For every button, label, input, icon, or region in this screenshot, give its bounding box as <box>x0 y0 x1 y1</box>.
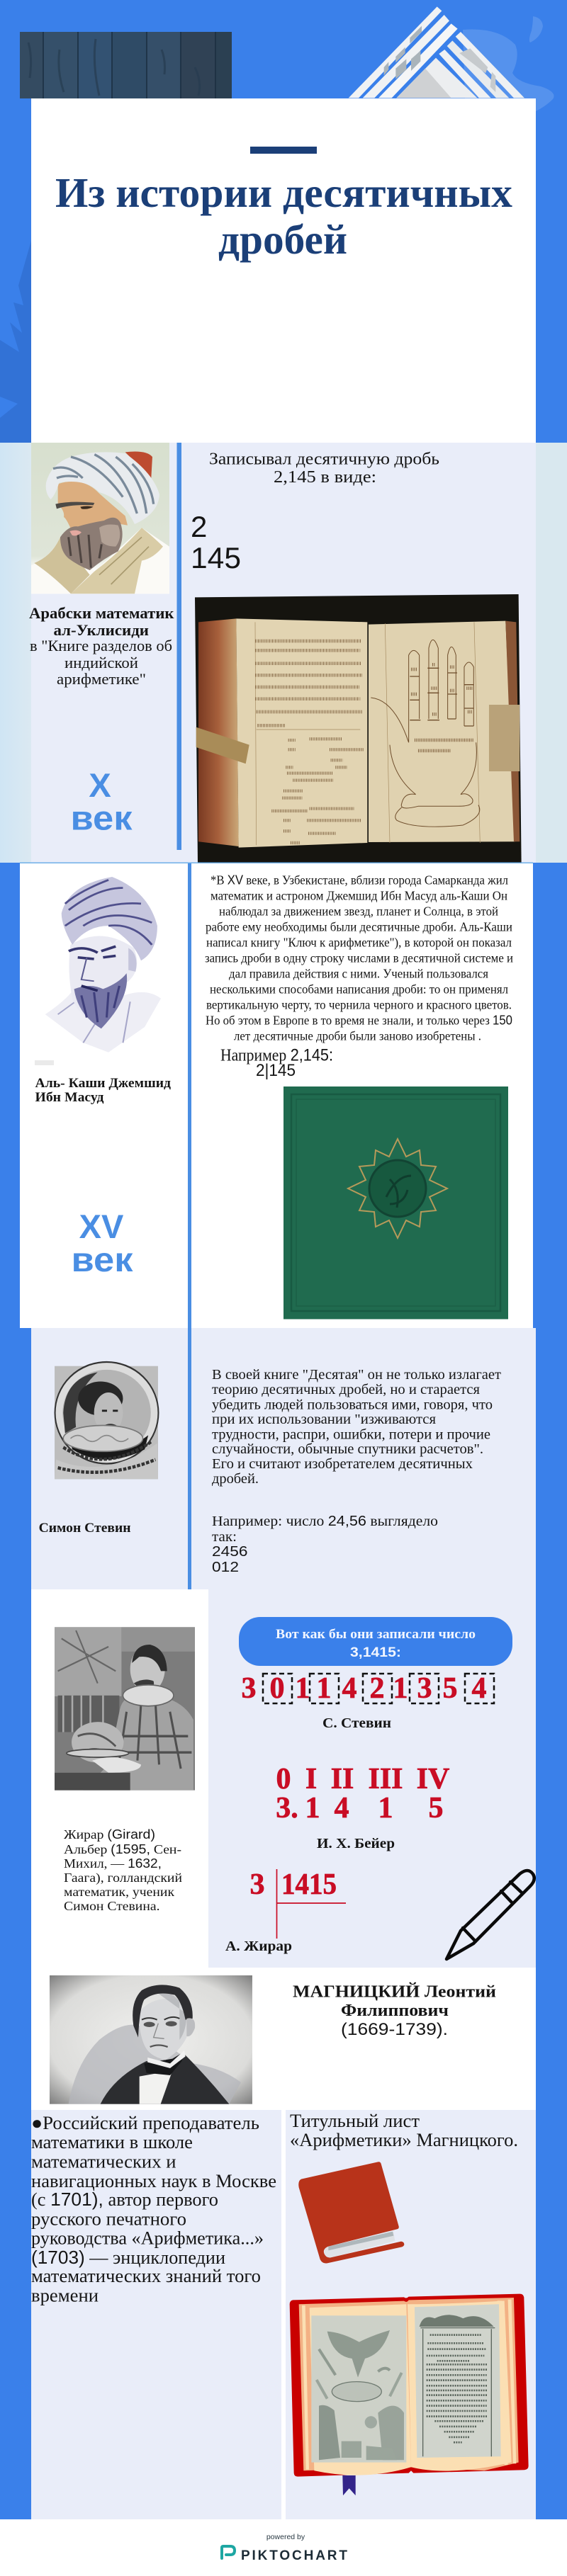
fraction notation: 145 <box>191 541 241 574</box>
Stevin notation: 2 <box>370 1672 384 1705</box>
example: 012 <box>212 1560 239 1575</box>
bio text: математик, ученик <box>64 1885 174 1899</box>
panel: biography <box>31 2110 281 2519</box>
intro text: Записывал десятичную дробь <box>209 450 439 469</box>
example <box>212 1514 438 1575</box>
Beyer notation: IV <box>417 1763 449 1795</box>
bio text: Гаага), голландский <box>64 1871 182 1885</box>
fraction notation <box>191 510 241 574</box>
Beyer notation: 3. <box>276 1792 298 1825</box>
Beyer notation: 1 <box>378 1792 393 1825</box>
Girard notation <box>225 1868 346 1954</box>
century label: X: век <box>71 800 133 837</box>
intro text <box>209 450 439 487</box>
Beyer notation: 1 <box>305 1792 320 1825</box>
section: Girard and notations <box>31 1589 536 1968</box>
right page text <box>420 2315 495 2456</box>
description: трудности, распри, ошибки, потери и прочие <box>212 1426 490 1442</box>
Stevin notation: 5 <box>442 1672 458 1705</box>
caption: Титульный лист <box>290 2111 420 2131</box>
example: Например: число 24,56 выглядело <box>212 1514 438 1529</box>
example notation: 2|145 <box>256 1061 296 1080</box>
title: Из истории десятичных <box>55 169 512 216</box>
paragraph: работе ему необходимы были десятичные дроби. Аль-Каши <box>206 919 512 934</box>
bio text <box>64 1827 182 1913</box>
panel: biography: русского печатного <box>31 2208 186 2230</box>
Stevin notation: 0 <box>269 1672 285 1705</box>
Girard notation: 1415 <box>281 1868 337 1901</box>
section: Stevin <box>31 1328 536 1589</box>
Beyer notation: И. Х. Бейер <box>317 1836 395 1851</box>
title: дробей <box>218 216 347 263</box>
century label: XV <box>71 1208 134 1279</box>
description: случайности, обычные спутники расчетов". <box>212 1441 483 1457</box>
Beyer notation: II <box>331 1763 354 1795</box>
description: Его и считают изобретателем десятичных <box>212 1456 473 1472</box>
footer <box>0 2519 567 2576</box>
description <box>212 1367 501 1487</box>
paragraph: запись дроби в одну строку числами в десятичной системе и <box>205 951 513 965</box>
section: Magnitsky header <box>31 1968 536 2110</box>
wood panel <box>20 32 232 98</box>
footer: powered by <box>266 2533 305 2541</box>
title <box>55 169 512 263</box>
green book cover <box>284 1086 508 1319</box>
fraction notation: 2 <box>191 510 207 543</box>
name <box>35 1076 171 1105</box>
Stevin notation: 3 <box>417 1672 432 1705</box>
header card <box>31 98 536 443</box>
caption: в "Книге разделов об <box>30 637 172 654</box>
name: МАГНИЦКИЙ Леонтий <box>293 1983 496 2002</box>
paragraph: написал книгу "Ключ к арифметике"), в которой он показал <box>206 935 512 950</box>
manuscript photo <box>195 594 522 863</box>
callout pill <box>239 1617 512 1666</box>
title accent bar <box>250 147 317 154</box>
panel: biography: руководства «Арифметика...» <box>31 2228 264 2248</box>
century label: X <box>71 766 133 837</box>
intro text: 2,145 в виде: <box>274 468 376 487</box>
paragraph: вертикальную черту, то чернила черного и красного цветов. <box>206 997 512 1011</box>
Stevin notation: 3 <box>241 1672 257 1705</box>
footer: PIKTOCHART <box>241 2548 347 2563</box>
portrait: Stevin <box>55 1362 158 1479</box>
portrait: al-Kashi <box>45 877 161 1052</box>
bio text: Симон Стевина. <box>64 1899 160 1913</box>
bookmark <box>342 2475 356 2495</box>
Girard notation: А. Жирар <box>225 1939 292 1954</box>
panel: biography: математических и <box>31 2152 176 2172</box>
paragraph: несколькими способами написания дроби: то он применял <box>210 982 508 996</box>
Beyer notation: III <box>368 1763 403 1795</box>
description: дробей. <box>212 1471 259 1487</box>
caption: Арабски математик <box>29 604 174 622</box>
paragraph: математик и астроном Джемшид Ибн Масуд аль-Каши Он <box>210 888 507 902</box>
Stevin notation: 4 <box>342 1672 357 1705</box>
portrait: Girard <box>55 1627 195 1791</box>
Girard notation: 3 <box>249 1868 265 1901</box>
callout pill: 3,1415: <box>350 1645 401 1660</box>
Stevin notation: С. Стевин <box>322 1715 391 1731</box>
name: Филиппович <box>341 2002 449 2020</box>
Beyer notation: 5 <box>428 1792 444 1825</box>
Stevin notation: 1 <box>295 1672 310 1705</box>
name: Ибн Масуд <box>35 1090 104 1105</box>
paragraph: дал правила действия с ними. Ученый пользовался <box>229 966 488 980</box>
divider <box>177 443 181 850</box>
century label: X: X <box>89 766 111 804</box>
name <box>293 1983 496 2039</box>
panel: title page <box>286 2110 536 2519</box>
Stevin notation: 1 <box>393 1672 408 1705</box>
panel: biography: ●Российский преподаватель <box>31 2113 259 2133</box>
portrait: al-Uqlidisi <box>31 443 169 594</box>
caption: арифметике" <box>57 670 146 688</box>
caption <box>29 604 174 688</box>
building photo <box>349 6 524 98</box>
Beyer notation: I <box>305 1763 317 1795</box>
icon: pencil <box>447 1871 534 1959</box>
bio text: Альбер (1595, Сен- <box>64 1842 181 1856</box>
caption: ал-Уклисиди <box>54 621 149 639</box>
small mark <box>35 1060 54 1065</box>
description: В своей книге "Десятая" он не только излагает <box>212 1367 501 1383</box>
example notation <box>220 1045 333 1080</box>
description: теорию десятичных дробей, но и старается <box>212 1382 480 1397</box>
caption: «Арифметики» Магницкого. <box>290 2130 518 2150</box>
panel: biography: (1703) — энциклопедии <box>31 2247 225 2268</box>
Stevin notation: 4 <box>472 1672 486 1705</box>
panel: biography: времени <box>31 2285 99 2306</box>
century label: XV: век <box>71 1242 134 1279</box>
Beyer notation: 4 <box>335 1792 349 1825</box>
section: al-Uqlidisi <box>0 443 567 863</box>
open book with title page <box>290 2294 529 2495</box>
decorative blob <box>463 16 554 111</box>
paragraph <box>205 873 513 1043</box>
icon: piktochart logo <box>222 2546 235 2558</box>
left page engraving <box>317 2330 404 2460</box>
caption <box>290 2111 518 2150</box>
panel gap <box>281 2110 286 2519</box>
example: так: <box>212 1529 237 1545</box>
Stevin notation <box>241 1672 494 1731</box>
panel: biography: математических знаний того <box>31 2266 261 2286</box>
description: при их использовании "изживаются <box>212 1412 436 1427</box>
name: (1669-1739). <box>341 2020 448 2039</box>
paragraph: *В XV веке, в Узбекистане, вблизи города Самарканда жил <box>210 873 508 887</box>
panel: biography: навигационных наук в Москве <box>31 2171 276 2191</box>
name: Аль- Каши Джемшид <box>35 1076 171 1091</box>
bio text: Михил, — 1632, <box>64 1856 162 1871</box>
paragraph: наблюдал за движением звезд, планет и Солнца, в этой <box>219 904 498 918</box>
panel: biography: (с 1701), автор первого <box>31 2189 218 2210</box>
icon: closed red book <box>298 2162 404 2264</box>
portrait: Magnitsky <box>50 1975 252 2104</box>
Beyer notation <box>276 1763 449 1851</box>
section: al-Kashi <box>20 863 533 1328</box>
example notation: Например 2,145: <box>220 1045 333 1065</box>
century label: XV: XV <box>79 1208 124 1245</box>
bio text: Жирар (Girard) <box>64 1827 155 1842</box>
example: 2456 <box>212 1544 248 1560</box>
description: убедить людей пользоваться ими, говоря, что <box>212 1397 493 1412</box>
callout pill: Вот как бы они записали число <box>276 1627 476 1642</box>
paragraph: Но об этом в Европе в то время не знали, и только через 150 <box>206 1013 512 1027</box>
paragraph: лет десятичные дроби были заново изобретены . <box>234 1028 481 1043</box>
caption: индийской <box>64 654 138 671</box>
panel: biography: математики в школе <box>31 2132 193 2152</box>
Stevin notation: 1 <box>316 1672 332 1705</box>
name: Симон Стевин <box>39 1521 131 1536</box>
Beyer notation: 0 <box>276 1763 291 1795</box>
decorative leaf <box>0 241 31 443</box>
